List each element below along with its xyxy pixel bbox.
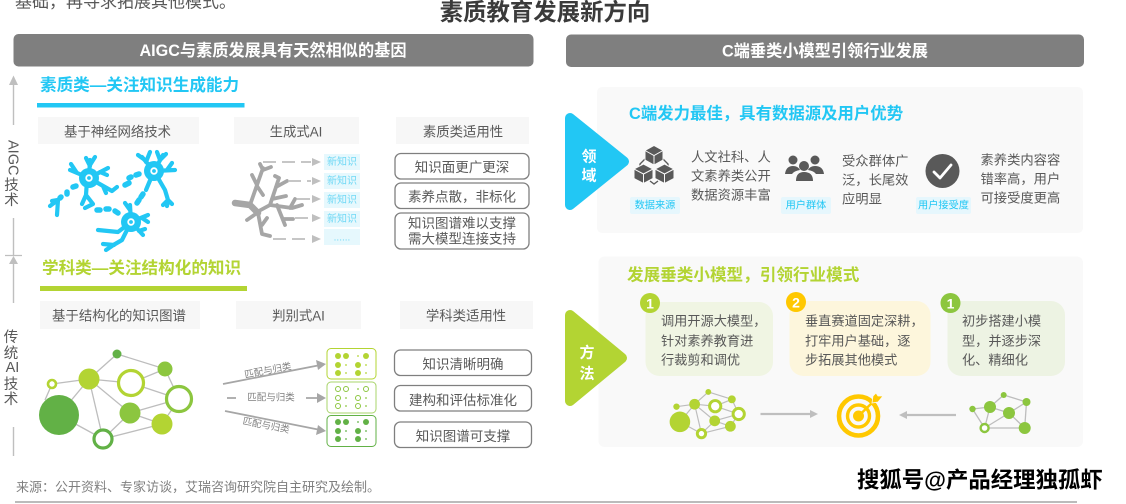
quality fit pills: 知识面更广更深 [415, 159, 509, 175]
text: data source: 文素养类公开 [691, 168, 771, 184]
card 2: 步拓展其他模式 [805, 352, 897, 368]
card 2: 打牢用户基础，逐 [805, 332, 910, 348]
column label: knowledge graph: 基于结构化的知识图谱 [52, 308, 186, 324]
text: user group: 应明显 [842, 192, 882, 206]
quality fit pills: 需大模型连接支持 [408, 230, 516, 246]
marker: method triangle [570, 315, 622, 401]
quality fit pills: 知识图谱难以支撑 [408, 215, 516, 231]
column label: neural network [38, 117, 199, 144]
card 1 [640, 293, 773, 376]
icon: check badge [926, 154, 960, 188]
axis: AIGC technology: 技 [4, 177, 19, 194]
column label: quality fit [396, 117, 529, 144]
new knowledge tags: 新知识 [327, 193, 357, 206]
panel heading: C端发力最佳，具有数据源及用户优势 [629, 104, 903, 123]
new knowledge tags: ...... [334, 232, 350, 244]
icon: target [839, 393, 883, 436]
match and classify arrows: 匹配与归类 [242, 415, 291, 436]
icon: user group [785, 156, 824, 181]
text: data source: 人文社科、人 [691, 150, 771, 164]
new knowledge tags [324, 154, 360, 245]
marker: domain triangle: 领 [581, 148, 597, 166]
text: user acceptance: 可接受度更高 [980, 190, 1060, 206]
dashed arrows to new knowledge [263, 158, 321, 243]
quality fit pills [395, 154, 529, 249]
text: data source: 数据资源丰富 [691, 186, 771, 202]
axis: AIGC technology: AIGC [4, 140, 20, 175]
text: user acceptance [980, 152, 1060, 206]
tag: user acceptance [916, 197, 971, 214]
icon: neurons [50, 152, 175, 250]
tag: data source [630, 197, 680, 214]
column label: subject fit: 学科类适用性 [426, 308, 506, 324]
marker: method triangle: 方 [579, 344, 595, 362]
heading: quality category: 素质类—关注知识生成能力 [40, 74, 239, 94]
subject fit pills: 建构和评估标准化 [409, 393, 517, 408]
icon: generative tree [235, 164, 302, 236]
card 3 [940, 293, 1065, 376]
card 3: 化、精细化 [962, 352, 1028, 368]
column label: discriminative AI [236, 301, 361, 329]
tag: user acceptance: 用户接受度 [918, 198, 969, 212]
knowledge graph network [39, 350, 192, 448]
panel: domain [570, 87, 1083, 233]
card 1: 调用开源大模型， [661, 314, 766, 328]
card 2 [786, 292, 930, 376]
heading: subject category [40, 258, 247, 291]
icon: data cubes [634, 146, 674, 184]
right header bar [566, 34, 1084, 67]
column label: generative AI: 生成式AI [270, 124, 322, 140]
column label: knowledge graph [40, 301, 200, 329]
dot matrix cards [327, 348, 376, 446]
card 1: 行裁剪和调优 [661, 352, 740, 368]
tag: user group: 用户群体 [786, 198, 826, 212]
column label: discriminative AI: 判别式AI [272, 308, 325, 324]
card 3: 1 [947, 296, 955, 312]
column label: subject fit [400, 301, 533, 329]
axis: traditional AI technology: 传 [4, 329, 18, 346]
quality fit pills: 素养点散，非标化 [408, 190, 516, 204]
text: data source [691, 150, 771, 202]
axis: traditional AI technology: 技 [4, 376, 18, 393]
panel: method [570, 256, 1083, 447]
right header bar: C端垂类小模型引领行业发展 [722, 42, 928, 60]
match and classify arrows: 匹配与归类 [243, 360, 293, 381]
axis: AIGC technology [4, 76, 22, 256]
left header bar [14, 34, 534, 66]
subject fit pills: 知识清晰明确 [422, 356, 504, 372]
text: user acceptance: 素养类内容容 [980, 152, 1060, 168]
heading: quality category [37, 74, 244, 108]
left header bar: AIGC与素质发展具有天然相似的基因 [139, 41, 407, 60]
heading: subject category: 学科类—关注结构化的知识 [42, 258, 241, 278]
tag: user group [781, 197, 831, 214]
bottom rule [15, 501, 1077, 503]
small network right [969, 392, 1031, 434]
marker: method triangle: 法 [579, 364, 595, 382]
text: user group [842, 154, 908, 206]
card 2: 垂直赛道固定深耕， [805, 312, 924, 328]
column label: neural network: 基于神经网络技术 [64, 124, 171, 140]
card 1: 针对素养教育进 [661, 334, 753, 348]
text: user acceptance: 错率高，用户 [980, 170, 1060, 186]
panel heading: 发展垂类小模型，引领行业模式 [627, 264, 860, 284]
text: user group: 受众群体广 [842, 154, 908, 168]
text: user group: 泛，长尾效 [842, 172, 908, 188]
match and classify arrows [223, 360, 326, 436]
watermark: 搜狐号@产品经理独孤虾 [857, 468, 1103, 492]
tag: data source: 数据来源 [635, 198, 675, 212]
arrow from right network [899, 411, 956, 419]
small network left [670, 389, 744, 438]
axis: traditional AI technology: AI [6, 360, 19, 376]
card 1: 1 [646, 296, 654, 312]
new knowledge tags: 新知识 [327, 174, 357, 187]
column label: quality fit: 素质类适用性 [423, 124, 503, 140]
axis: traditional AI technology [4, 256, 19, 456]
subject fit pills: 知识图谱可支撑 [416, 428, 510, 444]
marker: domain triangle [570, 118, 624, 205]
axis: AIGC technology: 术 [4, 192, 19, 209]
axis: traditional AI technology: 术 [4, 391, 18, 408]
new knowledge tags: 新知识 [327, 212, 357, 225]
marker: domain triangle: 域 [581, 168, 597, 184]
arrow to target [760, 410, 818, 418]
card 3: 初步搭建小模 [962, 312, 1041, 328]
axis: traditional AI technology: 统 [4, 345, 18, 362]
card 2: 2 [792, 294, 800, 310]
subject fit pills [394, 350, 532, 448]
match and classify arrows: 匹配与归类 [247, 392, 295, 404]
new knowledge tags: 新知识 [327, 155, 357, 168]
source note: 来源：公开资料、专家访谈，艾瑞咨询研究院自主研究及绘制。 [16, 480, 380, 494]
card 3: 型，并逐步深 [962, 334, 1041, 348]
column label: generative AI [234, 117, 359, 144]
